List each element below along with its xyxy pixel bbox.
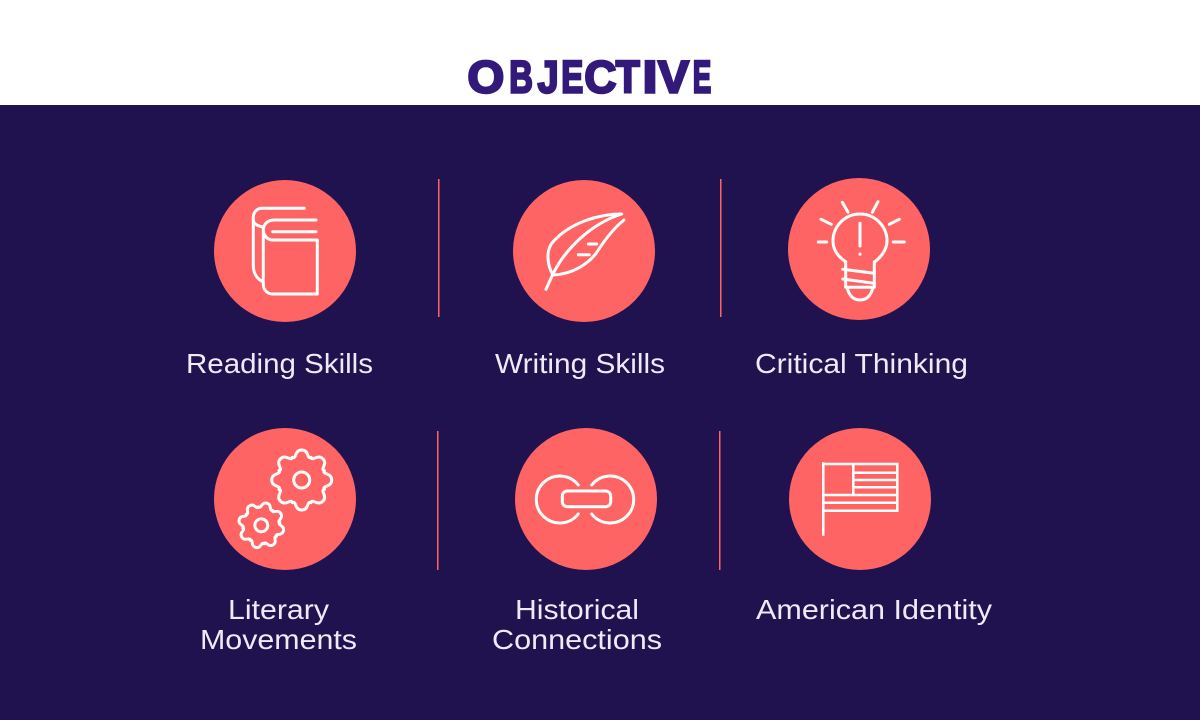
title: E — [693, 52, 711, 103]
icon: feather — [546, 214, 624, 289]
icon circle: identity — [789, 428, 931, 570]
icon circle: reading — [214, 180, 356, 322]
title: E — [561, 52, 583, 103]
item: Historical Connections — [492, 428, 662, 655]
icon: chain link — [536, 476, 634, 523]
label: Literary Movements: Movements — [200, 624, 357, 655]
item: Reading Skills — [186, 180, 373, 379]
divider: row 2 right — [719, 431, 720, 570]
title: T — [616, 52, 640, 103]
icon circle: connections — [515, 428, 657, 570]
label: Reading Skills: Reading Skills — [186, 348, 373, 379]
icon: gears — [234, 450, 332, 553]
title: C — [584, 52, 616, 103]
divider: row 2 left — [437, 431, 438, 570]
icon: flag — [823, 462, 897, 536]
divider: row 1 left — [438, 179, 440, 317]
item: Literary Movements — [200, 428, 357, 655]
label: Historical Connections: Connections — [492, 624, 662, 655]
icon circle: movements — [214, 428, 356, 570]
icon: light bulb — [818, 202, 904, 300]
icon: books — [253, 208, 317, 294]
label: American Identity: American Identity — [756, 594, 992, 625]
item: Writing Skills — [495, 180, 665, 379]
title: V — [658, 52, 690, 103]
title: O — [468, 52, 504, 103]
title: I — [642, 52, 658, 103]
label: Critical Thinking: Critical Thinking — [755, 348, 968, 379]
title: B — [509, 52, 533, 103]
divider: row 1 right — [720, 179, 722, 317]
item: Critical Thinking — [755, 178, 968, 379]
label: Historical Connections: Historical — [515, 594, 639, 625]
icon circle: writing — [513, 180, 655, 322]
label: Literary Movements: Literary — [228, 594, 329, 625]
title: J — [538, 52, 559, 103]
label: Writing Skills: Writing Skills — [495, 348, 665, 379]
icon circle: thinking — [788, 178, 930, 320]
item: American Identity — [756, 428, 992, 625]
